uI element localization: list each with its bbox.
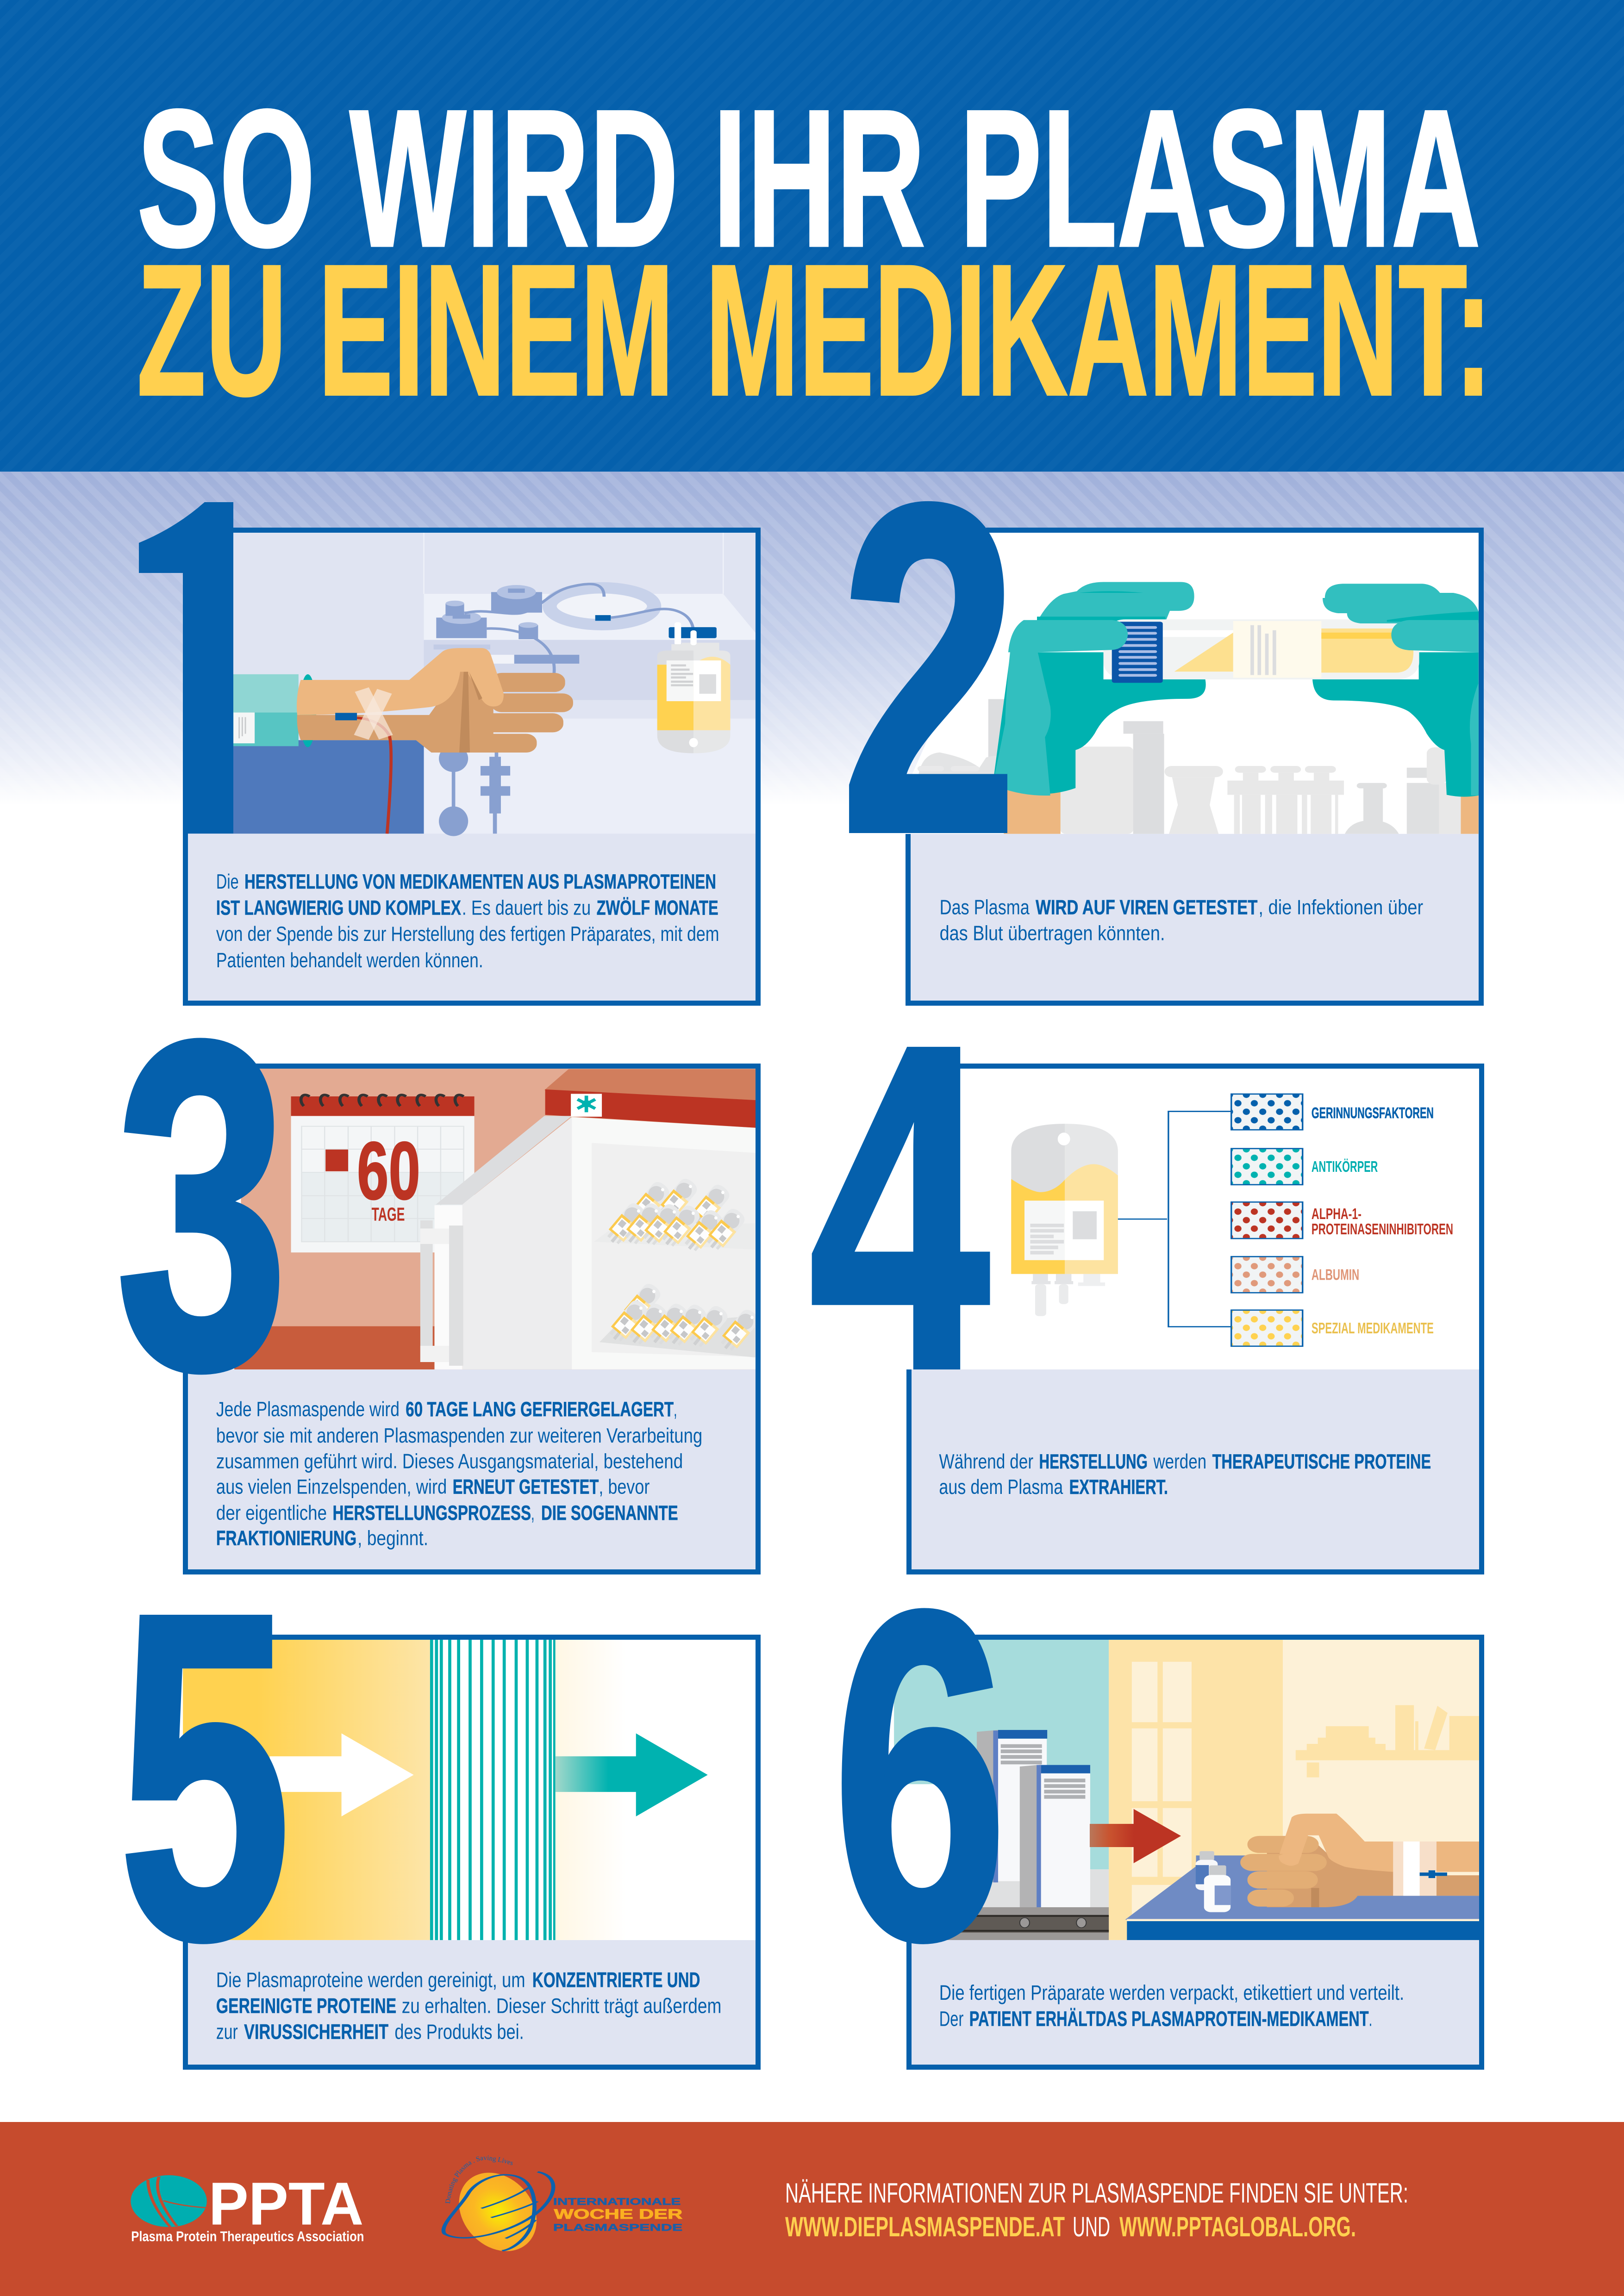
illustration: packaging and patient: [893, 1637, 1481, 1940]
vials: [1196, 1851, 1230, 1912]
Plasma week logo: Donating Plasma . Saving Lives: [444, 2154, 514, 2204]
text block 3: , bevor: [599, 1475, 650, 1499]
text block 2: [940, 896, 1423, 945]
frame: [909, 1066, 1481, 1572]
text block 1: [216, 870, 719, 972]
text block 2: , die Infektionen über: [1258, 896, 1423, 919]
panel 1: donation: [139, 502, 761, 1006]
footer: PPTA: [209, 2170, 363, 2238]
text block 4: EXTRAHIERT.: [1069, 1475, 1168, 1499]
text block 5: Die Plasmaproteine werden gereinigt, um: [216, 1968, 525, 1991]
text block 3: DIE SOGENANNTE: [541, 1501, 678, 1524]
freezer shelves with plasma bags: [594, 1176, 762, 1357]
panel 4: fractionation: [809, 951, 1482, 1572]
footer info text: WWW.PPTAGLOBAL.ORG.: [1119, 2211, 1356, 2242]
connector lines: [1118, 1111, 1231, 1327]
text block 5: des Produkts bei.: [394, 2020, 524, 2043]
number 5: 5: [119, 1518, 291, 2035]
test tube: [1104, 619, 1419, 683]
Plasma week logo: INTERNATIONALE: [553, 2196, 681, 2207]
calendar: TAGE: [372, 1204, 405, 1225]
desk and sleeve: [188, 740, 424, 834]
text block 3: ,: [674, 1398, 677, 1421]
hand: [297, 648, 573, 753]
text block 5: zur: [216, 2020, 238, 2043]
panel 5: purification: [119, 1518, 758, 2067]
legend: Gerinnungsfaktoren: [1231, 1094, 1434, 1130]
text block 3: , beginnt.: [357, 1527, 428, 1549]
footer info text: [785, 2178, 1408, 2242]
text block 1: von der Spende bis zur Herstellung des fertigen Präparates, mit dem: [216, 922, 719, 946]
footer info text: WWW.DIEPLASMASPENDE.AT: [785, 2211, 1065, 2242]
text block 3: bevor sie mit anderen Plasmaspenden zur weiteren Verarbeitung: [216, 1424, 702, 1447]
tubing below hand: [439, 745, 510, 836]
header banner: [0, 0, 1624, 472]
number 1: 1: [88, 400, 294, 936]
legend: Antikörper: ANTIKÖRPER: [1312, 1158, 1378, 1176]
text block 5: KONZENTRIERTE UND: [532, 1968, 700, 1991]
text block 4: HERSTELLUNG: [1039, 1450, 1148, 1473]
illustration: filter with arrows: [177, 1637, 757, 1940]
frame: [185, 530, 758, 1003]
text block 3: Jede Plasmaspende wird: [216, 1398, 400, 1421]
text block 1: Die: [216, 870, 239, 893]
right fingers: [1323, 584, 1479, 652]
text block 6: Der: [939, 2007, 963, 2030]
patient hand: [1240, 1814, 1480, 1907]
Plasma week logo: [443, 2154, 682, 2252]
conveyor: [926, 1907, 1109, 1940]
frame: [908, 530, 1481, 1003]
text block 5: [216, 1968, 721, 2043]
legend: Alpha-1-Proteinaseninhibitoren: PROTEINASENINHIBITOREN: [1312, 1221, 1453, 1238]
number 2: 2: [840, 408, 1018, 928]
footer info text: UND: [1073, 2211, 1110, 2242]
text block 1: ZWÖLF MONATE: [597, 896, 718, 919]
text block 3: ERNEUT GETESTET: [453, 1475, 599, 1499]
frame: [909, 1637, 1481, 2067]
panel 6: distribution: [832, 1515, 1482, 2067]
text block 2: WIRD AUF VIREN GETESTET: [1036, 896, 1258, 919]
arrow: teal: [556, 1733, 708, 1817]
lab glassware: [918, 699, 1461, 834]
number 4: 4: [809, 951, 992, 1464]
plasma bag: [657, 622, 731, 753]
text block 1: HERSTELLUNG VON MEDIKAMENTEN AUS PLASMAPROTEINEN: [244, 870, 716, 893]
text block 3: HERSTELLUNGSPROZESS: [332, 1501, 531, 1524]
arrow: red: [1090, 1809, 1181, 1863]
calendar: [291, 1095, 475, 1252]
legend: Antikörper: [1231, 1149, 1378, 1185]
text block 5: VIRUSSICHERHEIT: [244, 2020, 388, 2043]
shelf with books: [1296, 1705, 1480, 1777]
left glove: [993, 582, 1206, 796]
text block 3: zusammen geführt wird. Dieses Ausgangsmaterial, bestehend: [216, 1450, 683, 1473]
background gradient band: [0, 472, 1624, 805]
Plasma week logo: PLASMASPENDE: [553, 2221, 682, 2233]
plasma bag: [1011, 1124, 1118, 1316]
text block 2: das Blut übertragen könnten.: [940, 922, 1165, 945]
text block 3: aus vielen Einzelspenden, wird: [216, 1475, 447, 1499]
legend: Alpha-1-Proteinaseninhibitoren: [1231, 1202, 1453, 1238]
text block 4: [939, 1450, 1431, 1499]
legend: Alpha-1-Proteinaseninhibitoren: ALPHA-1-: [1312, 1206, 1362, 1223]
text block 4: aus dem Plasma: [939, 1475, 1063, 1499]
filter stripes: [430, 1637, 556, 1940]
illustration: arm donating plasma: [188, 530, 757, 836]
freezer: [420, 1069, 756, 1369]
window: [1132, 1662, 1192, 1919]
text block 1: . Es dauert bis zu: [462, 896, 591, 919]
legend: Spezial Medikamente: [1231, 1310, 1434, 1346]
text block 3: [216, 1398, 702, 1549]
text block 3: FRAKTIONIERUNG: [216, 1527, 356, 1549]
legend: Albumin: [1231, 1257, 1359, 1293]
number 6: 6: [832, 1515, 1007, 2035]
arrow: white: [270, 1733, 414, 1817]
illustration: gloved hands holding test tube: [906, 533, 1479, 834]
centrifuge machines: [434, 584, 693, 673]
text block 4: THERAPEUTISCHE PROTEINE: [1212, 1450, 1431, 1473]
catheter and tube: [357, 718, 391, 834]
right glove body: [1312, 652, 1479, 796]
bandage: [354, 687, 393, 740]
panel 3: freezing: [116, 945, 762, 1572]
text block 3: 60 TAGE LANG GEFRIERGELAGERT: [406, 1398, 674, 1421]
number 1: [139, 502, 233, 834]
text block 1: IST LANGWIERIG UND KOMPLEX: [216, 896, 461, 919]
text block 5: zu erhalten. Dieser Schritt trägt außerdem: [402, 1994, 721, 2017]
frame: [185, 1637, 758, 2067]
Plasma week logo: WOCHE DER: [554, 2206, 682, 2221]
text block 2: Das Plasma: [940, 896, 1030, 919]
footer: [0, 2122, 1624, 2296]
text block 5: GEREINIGTE PROTEINE: [216, 1994, 396, 2017]
text block 4: Während der: [939, 1450, 1033, 1473]
medicine boxes: [977, 1730, 1090, 1907]
table: [1125, 1855, 1480, 1920]
frame: [185, 1066, 758, 1572]
wrists: [1004, 784, 1061, 834]
calendar: 60: [357, 1125, 420, 1217]
PPTA logo: [131, 2170, 364, 2244]
text block 3: der eigentliche: [216, 1501, 327, 1524]
left thumb: [1008, 620, 1128, 652]
illustration: plasma bag and fractions: [1011, 1094, 1453, 1346]
legend: Spezial Medikamente: SPEZIAL MEDIKAMENTE: [1312, 1320, 1434, 1337]
footer: Plasma Protein Therapeutics Association: [131, 2228, 364, 2244]
text block 3: ,: [531, 1501, 535, 1524]
panel 2: testing: [840, 408, 1481, 1003]
text block 1: Patienten behandelt werden können.: [216, 949, 483, 972]
text block 6: [939, 1981, 1404, 2030]
legend: Albumin: ALBUMIN: [1312, 1267, 1359, 1284]
illustration: calendar and freezer: [234, 1066, 757, 1369]
text block 4: werden: [1153, 1450, 1206, 1473]
text block 6: .: [1369, 2007, 1372, 2030]
number 3: 3: [116, 945, 288, 1465]
legend: Gerinnungsfaktoren: GERINNUNGSFAKTOREN: [1312, 1105, 1434, 1122]
